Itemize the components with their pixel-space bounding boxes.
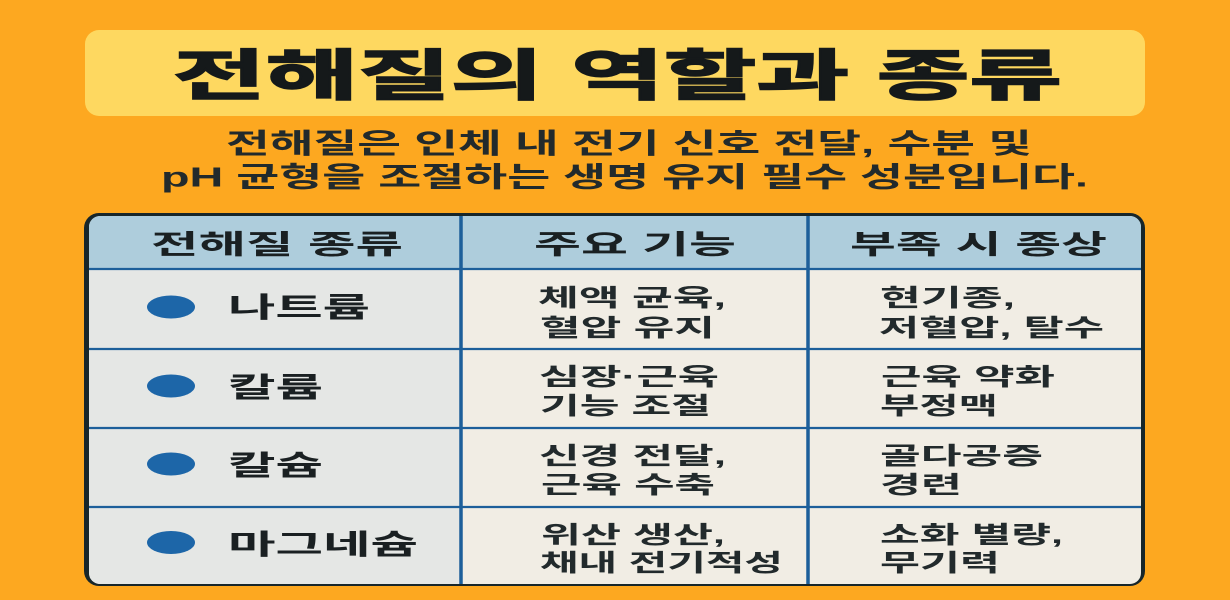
subtitle text: 전해질은 인체 내 전기 신호 전달, 수분 및 (226, 128, 1032, 159)
row: potassium (147, 364, 1055, 420)
row: calcium: 골다공증 (880, 443, 1043, 470)
table header row: 주요 기능 (534, 230, 736, 260)
row: sodium: 나트륨 (228, 292, 370, 323)
row: sodium: 현기종, (880, 285, 1015, 312)
row: magnesium: 마그네슘 (228, 529, 418, 560)
row: sodium: 저혈압, 탈수 (879, 315, 1104, 342)
row: potassium: 심장·근육 (539, 364, 719, 391)
table header row: 부족 시 종상 (850, 230, 1107, 260)
row: sodium: 혈압 유지 (540, 315, 715, 342)
title banner (85, 30, 1145, 116)
row: calcium: 경련 (880, 472, 962, 499)
table header row (151, 230, 1107, 260)
row: calcium (147, 443, 1043, 499)
row: magnesium: 채내 전기적성 (540, 550, 783, 577)
row: calcium: 근육 수축 (541, 472, 715, 499)
row: magnesium: 무기력 (880, 550, 1000, 577)
row: calcium: 칼슘 (228, 450, 323, 481)
row: calcium: 신경 전달, (539, 443, 726, 470)
row: potassium: 근육 약화 (881, 364, 1055, 391)
row: magnesium: 소화 별량, (880, 522, 1063, 549)
row: potassium: 부정맥 (880, 393, 998, 420)
panel: electrolyte table (84, 213, 1145, 586)
row: magnesium (147, 522, 1063, 577)
row: potassium: 기능 조절 (540, 393, 711, 420)
row: sodium (147, 285, 1104, 342)
icon: calcium dot (147, 452, 195, 476)
table header row: 전해질 종류 (151, 230, 403, 260)
icon: magnesium dot (147, 531, 195, 554)
icon: potassium dot (147, 374, 195, 398)
row: magnesium: 위산 생산, (541, 522, 725, 549)
table frame and fills (84, 213, 1145, 586)
row: potassium: 칼륨 (228, 372, 323, 403)
subtitle text: pH 균형을 조절하는 생명 유지 필수 성분입니다. (161, 162, 1088, 192)
title: 전해질의 역할과 종류 (173, 45, 1062, 107)
icon: sodium dot (147, 296, 195, 318)
row: sodium: 체액 균육, (538, 285, 726, 312)
subtitle text (161, 128, 1088, 192)
